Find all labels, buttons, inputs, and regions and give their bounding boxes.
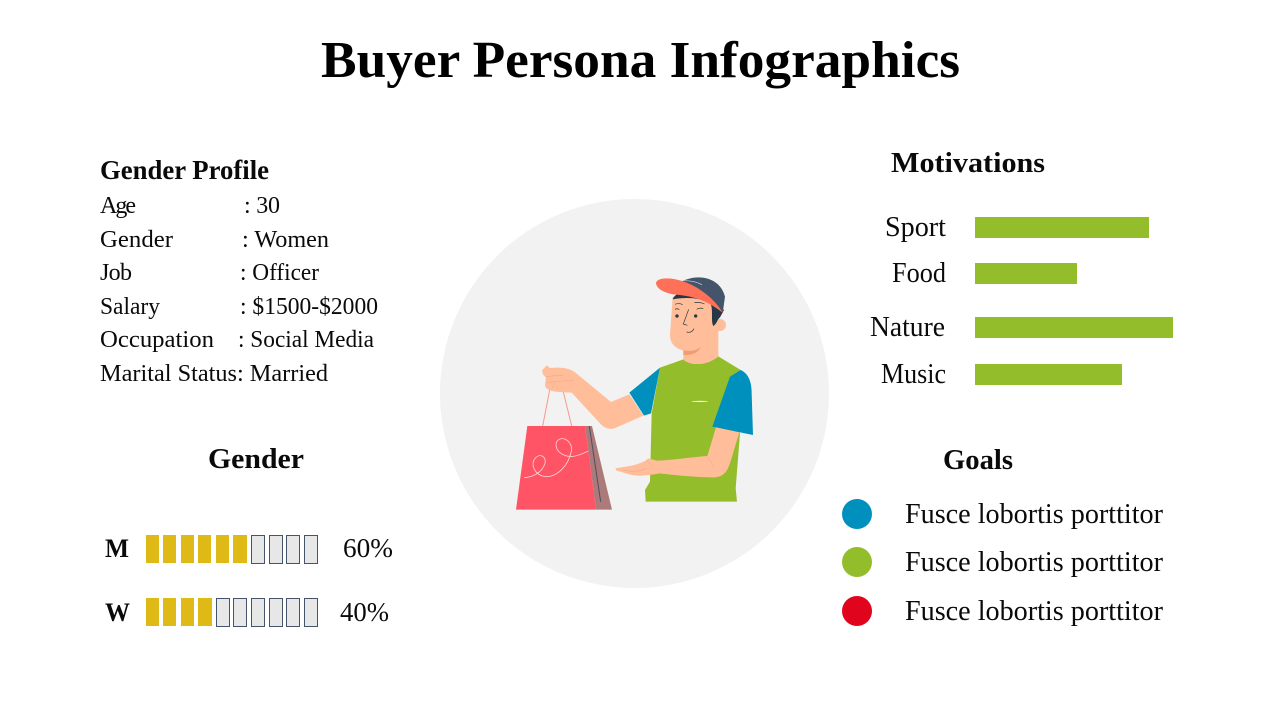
icon: cap crown bbox=[682, 277, 725, 313]
profile row: marital status: Marital Status: Married bbox=[100, 361, 328, 387]
icon: face bbox=[670, 297, 718, 351]
icon: fingers bbox=[545, 375, 574, 388]
row: music: Music bbox=[881, 358, 946, 390]
row: sport: Sport bbox=[885, 211, 946, 243]
goal 2: Fusce lobortis porttitor bbox=[905, 547, 1164, 578]
icon: cap highlight bbox=[684, 281, 702, 285]
icon: neck shadow bbox=[683, 347, 701, 355]
row: music bbox=[881, 358, 1122, 390]
meter: women 40 percent bbox=[146, 598, 318, 626]
panel: motivations bbox=[870, 148, 1173, 390]
heading: gender: Gender bbox=[208, 443, 304, 475]
value: 60%: 60% bbox=[343, 533, 393, 563]
icon: raised arm bbox=[542, 365, 643, 429]
heading: motivations: Motivations bbox=[891, 148, 1045, 179]
heading: gender profile: Gender Profile bbox=[100, 155, 269, 185]
heading: goals: Goals bbox=[943, 444, 1013, 476]
panel: central circle bbox=[440, 199, 829, 588]
profile row: salary: : $1500-$2000 bbox=[240, 294, 378, 320]
icon: right sleeve bbox=[712, 370, 753, 435]
profile row: age: : 30 bbox=[244, 193, 280, 219]
icon: left sleeve bbox=[629, 368, 660, 416]
profile row: job: Job bbox=[100, 260, 132, 286]
panel: gender meter bbox=[105, 443, 393, 627]
goal 3: Fusce lobortis porttitor bbox=[905, 596, 1164, 627]
row: nature: Nature bbox=[870, 311, 945, 343]
title: Buyer Persona Infographics bbox=[321, 32, 960, 89]
icon: cap visor bbox=[656, 278, 723, 313]
row: sport bbox=[885, 211, 1149, 243]
goal 1: Fusce lobortis porttitor bbox=[905, 499, 1164, 530]
label: M: M bbox=[105, 534, 129, 563]
icon: neck bbox=[683, 340, 718, 364]
row: nature bbox=[870, 311, 1173, 343]
icon: hair bbox=[673, 292, 724, 326]
meter: men 60 percent bbox=[146, 535, 318, 564]
icon: bag handles bbox=[543, 385, 572, 426]
value: 40%: 40% bbox=[340, 597, 389, 627]
icon: eyes and brows bbox=[675, 302, 705, 332]
icon: torso bbox=[645, 356, 741, 502]
profile row: occupation: Occupation bbox=[100, 327, 214, 353]
row: food bbox=[892, 257, 1077, 289]
row: food: Food bbox=[892, 257, 946, 289]
profile row: age: Age bbox=[100, 193, 136, 219]
profile row: gender: Gender bbox=[100, 227, 173, 253]
profile row: salary: Salary bbox=[100, 294, 160, 320]
icon: pocket mark bbox=[692, 400, 708, 403]
icon: ear bbox=[714, 319, 726, 331]
profile row: occupation: : Social Media bbox=[238, 327, 374, 353]
icon: hand creases bbox=[623, 457, 714, 471]
icon: lower arm and hand bbox=[615, 427, 739, 477]
icon: shopping bag bbox=[516, 426, 612, 510]
panel: goals bbox=[842, 444, 1164, 627]
profile row: gender: : Women bbox=[242, 227, 329, 253]
illustration: shopper with bag bbox=[516, 277, 753, 510]
panel: gender profile bbox=[100, 155, 378, 387]
profile row: job: : Officer bbox=[240, 260, 319, 286]
label: W: W bbox=[105, 598, 130, 627]
